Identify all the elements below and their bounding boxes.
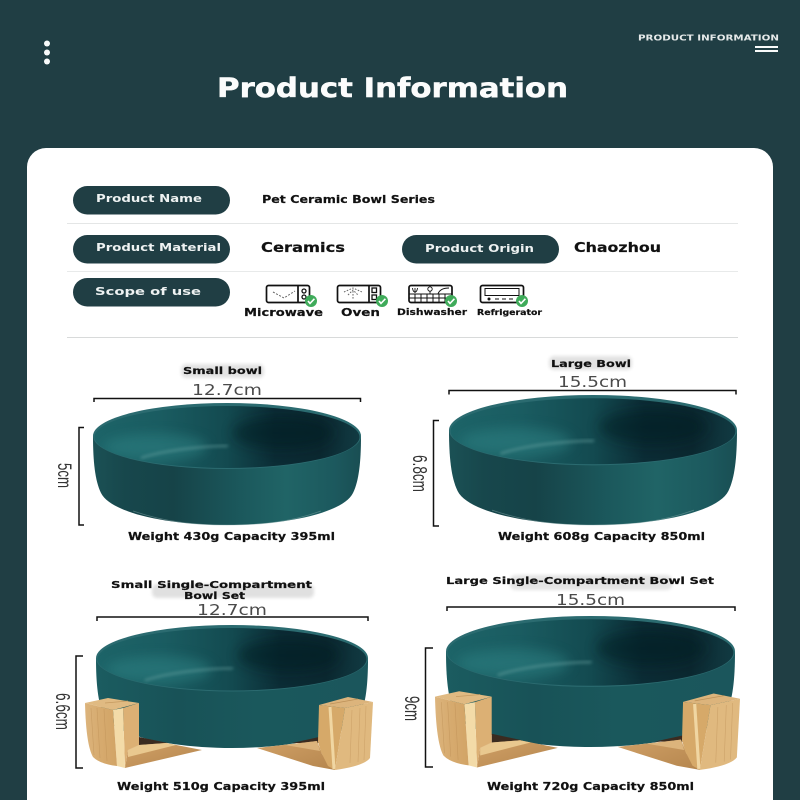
dimension: width 15.5cm: 15.5cm	[558, 373, 627, 391]
dimension: width 15.5cm: 15.5cm	[556, 591, 625, 609]
heading: large bowl	[549, 356, 632, 370]
label: dishwasher: Dishwasher	[397, 308, 468, 318]
heading: small bowl set: Small Single-Compartment	[111, 580, 312, 591]
photo: large bowl on bamboo stand	[435, 616, 740, 770]
heading: large bowl set	[446, 575, 714, 590]
label: microwave: Microwave	[244, 306, 323, 319]
panel: small bowl set	[51, 580, 373, 793]
dimension: height 6.8cm: 6.8cm	[408, 455, 430, 492]
dimension: width 15.5cm	[447, 591, 735, 611]
dimension: height 9cm	[400, 648, 433, 767]
icon: dishwasher	[409, 286, 457, 307]
dimension: height 6.6cm	[51, 656, 83, 768]
label: oven: Oven	[341, 306, 380, 319]
dimension: width 12.7cm	[94, 381, 360, 402]
heading: small bowl: Small bowl	[183, 366, 262, 377]
row: product name: Product Name	[96, 192, 202, 205]
icon: oven	[338, 286, 388, 307]
dimension: height 5cm: 5cm	[53, 463, 74, 488]
panel: white card	[27, 148, 773, 800]
dimension: height 6.6cm: 6.6cm	[51, 693, 73, 730]
photo: large bowl	[449, 395, 737, 525]
row: product origin	[402, 235, 661, 264]
specs: small bowl set: Weight 510g Capacity 395ml	[117, 780, 325, 793]
header label: PRODUCT INFORMATION	[638, 34, 779, 42]
heading: small bowl set: Bowl Set	[184, 591, 245, 602]
heading: small bowl	[181, 364, 264, 378]
dimension: width 12.7cm	[97, 601, 368, 621]
label: refrigerator: Refrigerator	[477, 308, 542, 317]
dimension: height 9cm: 9cm	[400, 696, 423, 721]
row: product material	[73, 235, 345, 264]
row: product origin: Chaozhou	[574, 241, 661, 256]
dimension: height 5cm	[53, 428, 84, 525]
dimension: width 12.7cm: 12.7cm	[197, 601, 267, 619]
row: product name: Pet Ceramic Bowl Series	[262, 193, 436, 206]
panel: product details table	[67, 186, 738, 338]
title: Product Information	[217, 73, 568, 104]
row: product name	[73, 186, 436, 214]
row: scope of use: Scope of use	[95, 285, 201, 298]
specs: small bowl: Weight 430g Capacity 395ml	[128, 530, 335, 543]
row: product material: Product Material	[96, 241, 221, 254]
photo: small bowl on bamboo stand	[85, 625, 373, 770]
heading: small bowl set	[111, 580, 314, 602]
specs: large bowl: Weight 608g Capacity 850ml	[498, 530, 705, 543]
icon: refrigerator	[480, 286, 528, 307]
heading: large bowl set: Large Single-Compartment Bowl Set	[446, 576, 714, 587]
panel: large bowl set	[400, 575, 740, 793]
row: scope of use	[73, 278, 230, 306]
photo: small bowl	[93, 403, 361, 525]
dimension: height 6.8cm	[408, 420, 439, 526]
specs: large bowl set: Weight 720g Capacity 850ml	[487, 780, 694, 793]
panel: large bowl	[408, 356, 737, 543]
icon: menu lines	[755, 46, 778, 52]
row: product material: Ceramics	[261, 241, 345, 256]
dimension: width 15.5cm	[449, 373, 736, 394]
icon: microwave	[266, 286, 317, 307]
panel: small bowl	[53, 364, 361, 543]
icon: three vertical dots	[44, 40, 50, 64]
heading: large bowl: Large Bowl	[551, 359, 631, 370]
row: product origin: Product Origin	[425, 242, 534, 255]
dimension: width 12.7cm: 12.7cm	[192, 381, 262, 399]
